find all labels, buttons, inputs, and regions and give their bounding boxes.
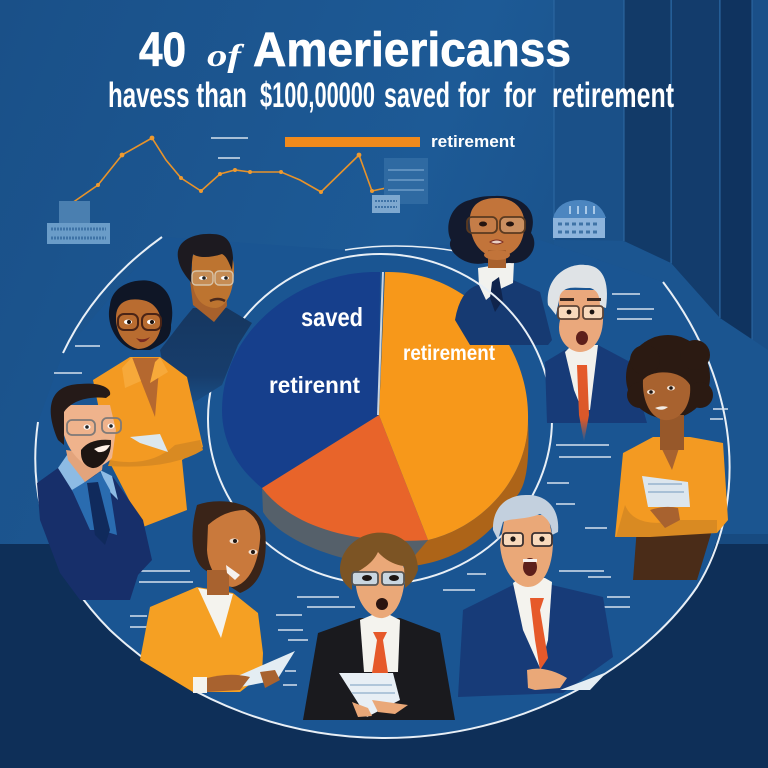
pie chart: retirement [403, 342, 495, 365]
big circle backdrop [35, 237, 730, 738]
icon: building left [47, 201, 110, 244]
person: centre man in black suit [303, 533, 455, 720]
slice: orange-red [262, 415, 428, 541]
legend: retirement [285, 132, 515, 151]
person: man top left [160, 234, 252, 405]
slice: saved (blue) [222, 272, 380, 488]
title: for [504, 76, 536, 115]
title: for [458, 76, 490, 115]
person: grey-haired man right [545, 265, 647, 442]
title: retirement [552, 76, 674, 115]
title: havess than [108, 76, 247, 115]
icon: building right [553, 200, 606, 238]
pie chart [222, 272, 528, 567]
title: Ameriericanss [253, 24, 571, 77]
pie depth [380, 420, 528, 567]
person: top woman [448, 196, 552, 345]
title: 40 [139, 24, 186, 77]
title: $100,00000 [260, 76, 375, 115]
person: bearded man left [37, 384, 152, 600]
title: of [207, 37, 245, 73]
inner circle [208, 254, 552, 584]
person: woman orange left [93, 280, 203, 527]
title: saved [384, 76, 450, 115]
legend: retirement: retirement [431, 132, 515, 151]
person: grey-haired man bottom right [458, 495, 613, 697]
slice: retirement (orange) [379, 272, 528, 540]
person: curly-haired woman right [615, 335, 728, 580]
pie chart: retirennt [269, 372, 360, 398]
pie labels: saved [301, 302, 363, 332]
icon: building centre [372, 158, 428, 213]
line chart [72, 136, 386, 203]
title [108, 24, 674, 115]
person: woman bottom left [140, 501, 295, 693]
pie divider [378, 272, 383, 415]
